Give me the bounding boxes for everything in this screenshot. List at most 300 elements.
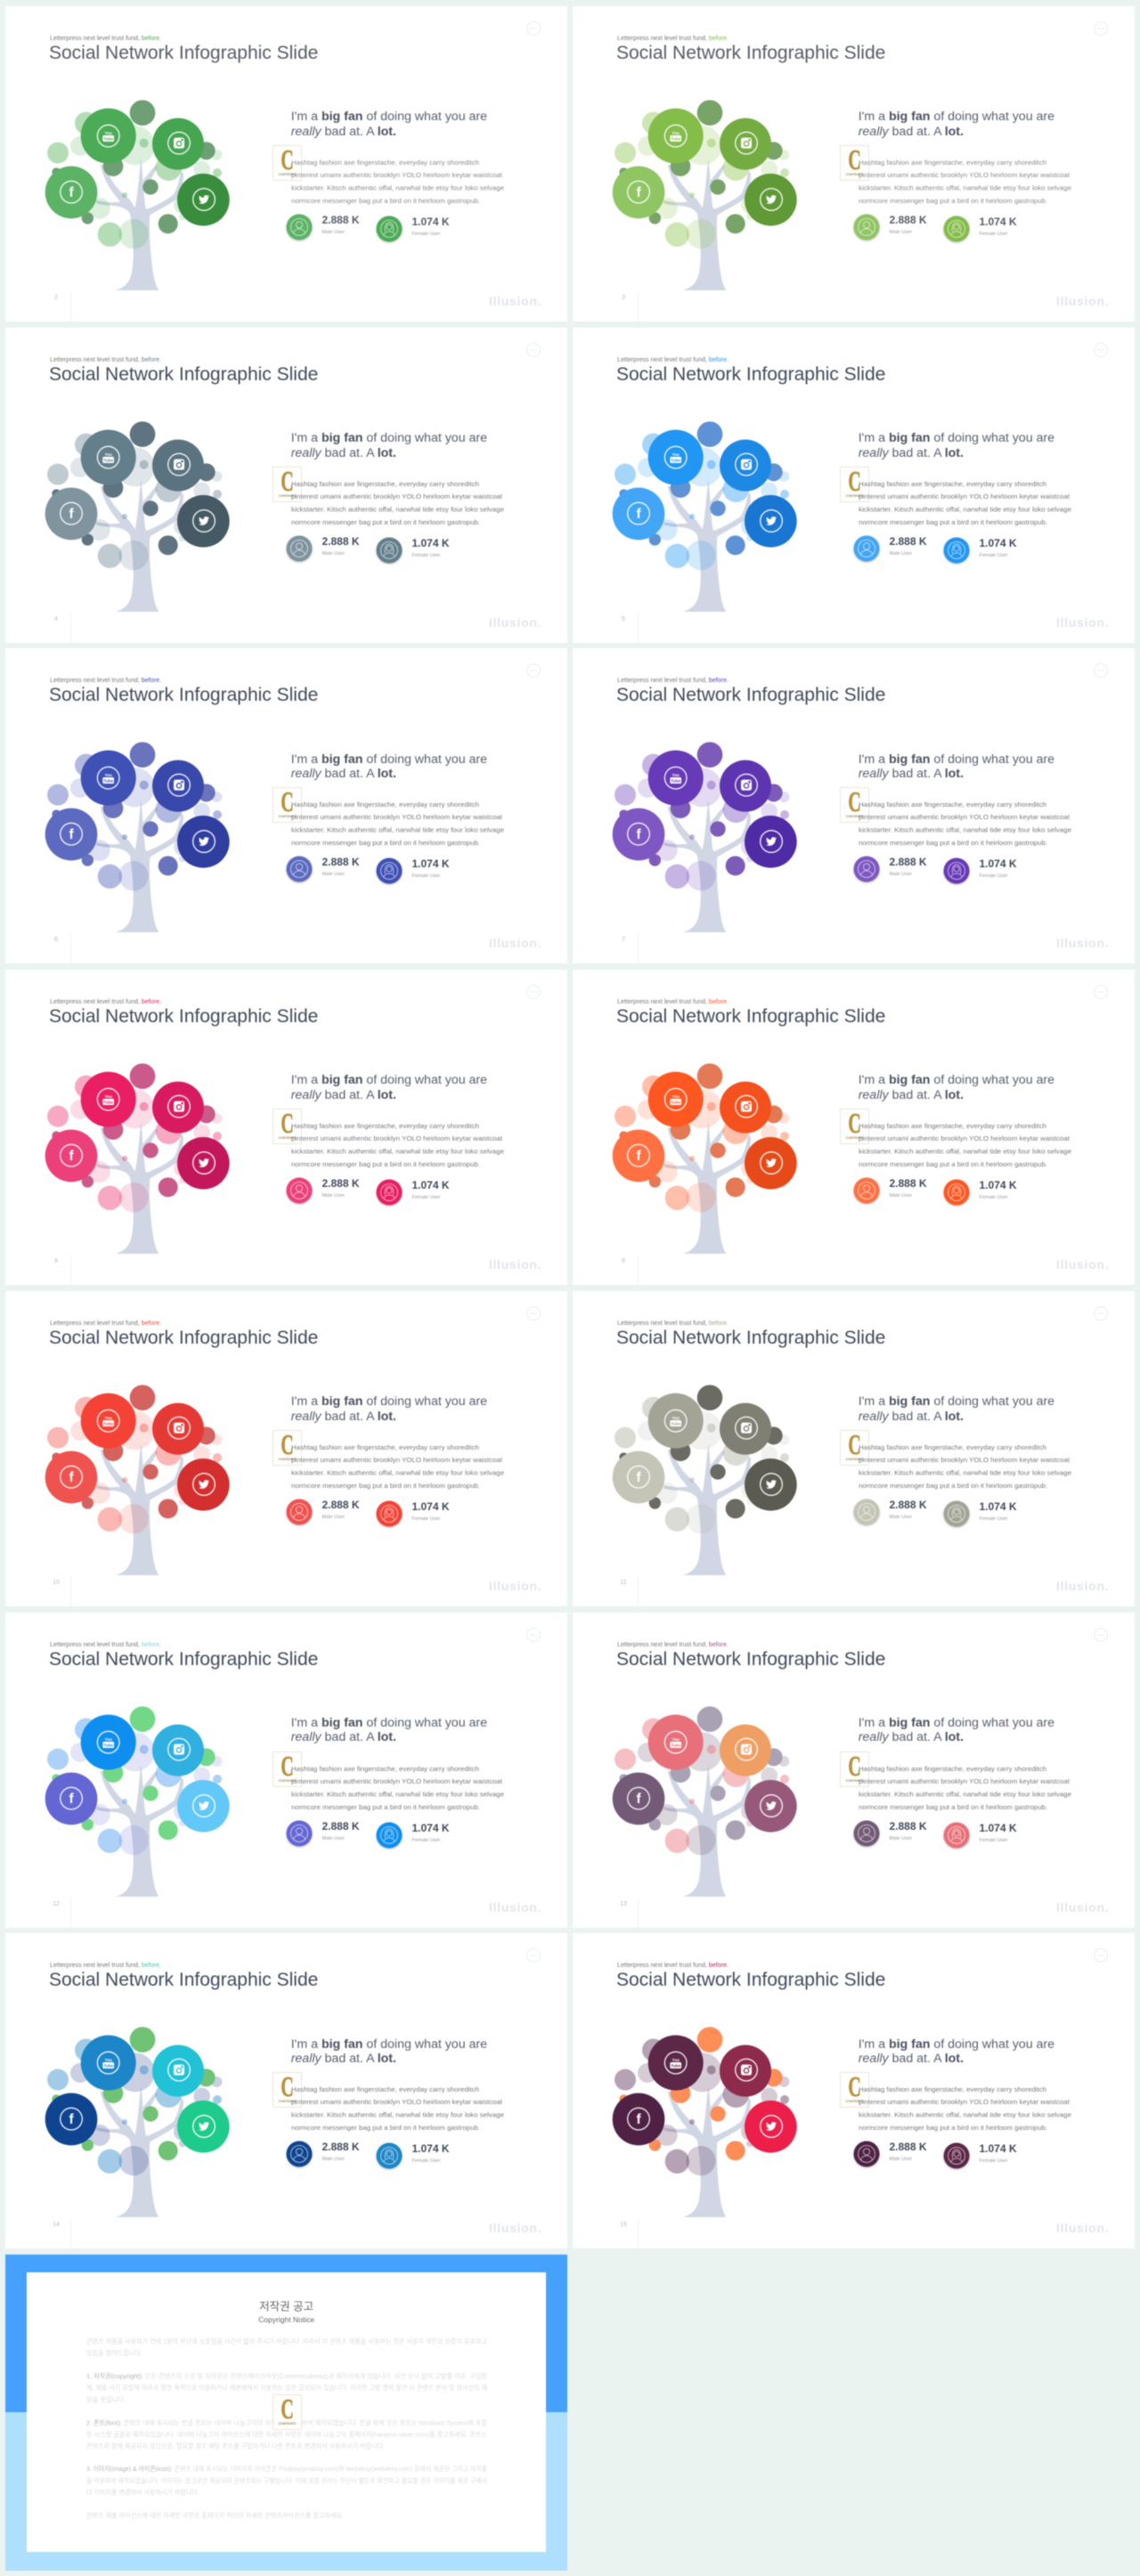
bubble: Instagram bbox=[720, 1724, 771, 1776]
headline: I'm a big fan of doing what you are bbox=[291, 2037, 487, 2052]
headline bbox=[291, 1716, 487, 1745]
bubble: YouTube: You bbox=[672, 131, 680, 135]
bubble: YouTube: Tube bbox=[671, 136, 680, 141]
stat: male users bbox=[285, 855, 360, 884]
panel: slide 13 rose tree bbox=[573, 1612, 1135, 1927]
stat: female users bbox=[943, 1822, 1032, 1852]
icon: menu dots bbox=[525, 1947, 542, 1963]
stat: female users bbox=[376, 1500, 465, 1531]
body text bbox=[290, 801, 504, 848]
stat: female users: 1.074 K bbox=[411, 1500, 450, 1513]
panel: slide 12 blue and green tree bbox=[5, 1612, 567, 1927]
body text bbox=[859, 158, 1072, 205]
bubble: Facebook bbox=[45, 2093, 97, 2146]
body text: pinterest umami authentic brooklyn YOLO heirloom keytar waistcoat bbox=[859, 492, 1070, 500]
body text: normcore messenger bag put a bird on it heirloom gastropub. bbox=[859, 197, 1047, 205]
headline: really bad at. A lot. bbox=[859, 1088, 964, 1102]
bubble: Facebook bbox=[45, 1772, 97, 1824]
bubble: YouTube bbox=[81, 2036, 136, 2091]
body text: kickstarter. Kitsch authentic offal, narwhal tide etsy four loko selvage bbox=[291, 505, 504, 513]
page number: 10 bbox=[53, 1580, 60, 1586]
bubble: YouTube: You bbox=[104, 131, 112, 135]
body text: normcore messenger bag put a bird on it heirloom gastropub. bbox=[291, 1482, 480, 1490]
headline: I'm a big fan of doing what you are bbox=[291, 1073, 487, 1087]
body text: kickstarter. Kitsch authentic offal, narwhal tide etsy four loko selvage bbox=[859, 183, 1071, 192]
title: Social Network Infographic Slide bbox=[616, 1970, 885, 1990]
bubble: YouTube: You bbox=[672, 2058, 680, 2062]
stat: female users: Female User bbox=[411, 553, 441, 558]
icon: menu dots bbox=[1094, 21, 1108, 36]
bubble: YouTube: Tube bbox=[671, 779, 680, 784]
page number: 5 bbox=[622, 616, 625, 622]
bubble: YouTube bbox=[81, 109, 136, 164]
body text: Hashtag fashion axe fingerstache, everyday carry shoreditch bbox=[291, 480, 479, 488]
bubble: YouTube bbox=[648, 751, 704, 806]
body text: Hashtag fashion axe fingerstache, everyday carry shoreditch bbox=[291, 1443, 479, 1451]
stat: female users: 1.074 K bbox=[980, 857, 1017, 870]
stat: male users: Male User bbox=[322, 551, 345, 557]
notice paragraphs: 있음을 알려드립니다. bbox=[86, 2348, 142, 2357]
bubble: Instagram bbox=[152, 118, 204, 170]
body text: pinterest umami authentic brooklyn YOLO heirloom keytar waistcoat bbox=[859, 2098, 1070, 2106]
body text bbox=[291, 1117, 514, 1179]
bubble: Instagram bbox=[152, 1402, 204, 1454]
body text: Hashtag fashion axe fingerstache, everyday carry shoreditch bbox=[859, 1765, 1046, 1773]
bubble: Facebook: f bbox=[636, 1149, 641, 1164]
body text: Hashtag fashion axe fingerstache, everyday carry shoreditch bbox=[291, 801, 479, 809]
page number: 8 bbox=[54, 1258, 58, 1264]
bubble: YouTube: Tube bbox=[103, 2064, 113, 2068]
body text: kickstarter. Kitsch authentic offal, narwhal tide etsy four loko selvage bbox=[291, 1790, 504, 1798]
body text: pinterest umami authentic brooklyn YOLO heirloom keytar waistcoat bbox=[291, 171, 502, 179]
watermark logo: CONTENTS bbox=[279, 494, 296, 498]
icon: menu dots bbox=[1093, 1305, 1109, 1321]
headline: really bad at. A lot. bbox=[859, 1410, 964, 1424]
bubble: Facebook: f bbox=[69, 1792, 74, 1806]
body text: normcore messenger bag put a bird on it heirloom gastropub. bbox=[859, 1802, 1047, 1810]
body text: kickstarter. Kitsch authentic offal, narwhal tide etsy four loko selvage bbox=[859, 2111, 1071, 2119]
tree chart bbox=[594, 1365, 808, 1588]
stat: male users: Male User bbox=[889, 2157, 912, 2162]
bubble: YouTube: Tube bbox=[103, 1421, 113, 1426]
stat: female users: Female User bbox=[980, 1838, 1008, 1843]
body text: normcore messenger bag put a bird on it heirloom gastropub. bbox=[859, 517, 1047, 525]
stat: male users bbox=[852, 214, 927, 242]
stat: male users: 2.888 K bbox=[322, 1177, 360, 1190]
stat: male users: 2.888 K bbox=[889, 1177, 927, 1190]
bubble: Twitter bbox=[177, 816, 230, 868]
body text: pinterest umami authentic brooklyn YOLO heirloom keytar waistcoat bbox=[859, 171, 1070, 179]
watermark logo: CONTENTS bbox=[846, 173, 863, 176]
bubble: Facebook bbox=[45, 487, 97, 540]
watermark logo bbox=[273, 1751, 302, 1786]
page number: 15 bbox=[620, 2222, 627, 2228]
page number: 12 bbox=[53, 1900, 60, 1907]
tagline: Letterpress next level trust fund, before. bbox=[617, 356, 729, 363]
stat: male users: 2.888 K bbox=[322, 214, 360, 226]
icon: menu dots bbox=[1093, 1947, 1109, 1963]
stat: male users bbox=[853, 1820, 942, 1850]
stat: male users: Male User bbox=[889, 1515, 912, 1520]
headline: really bad at. A lot. bbox=[291, 125, 396, 139]
bubble: Instagram bbox=[720, 439, 771, 491]
bubble: Twitter bbox=[745, 174, 797, 226]
tagline: Letterpress next level trust fund, before. bbox=[50, 677, 161, 684]
icon: menu dots bbox=[1094, 343, 1108, 357]
stat: male users bbox=[285, 534, 360, 564]
stat: male users: 2.888 K bbox=[889, 856, 927, 868]
bubble: Facebook bbox=[613, 1451, 664, 1503]
stat: female users: 1.074 K bbox=[980, 1179, 1017, 1191]
panel: slide 6 indigo tree bbox=[5, 648, 567, 963]
body text bbox=[291, 1438, 514, 1500]
body text: pinterest umami authentic brooklyn YOLO heirloom keytar waistcoat bbox=[859, 1777, 1070, 1785]
bubble: Twitter bbox=[745, 495, 797, 547]
notice paragraphs: 콘텐츠 제품 라이선스에 대한 자세한 사항은 홈페이지 하단의 자세한 콘텐츠라이선스를 참고하세요. bbox=[86, 2510, 344, 2519]
watermark logo bbox=[273, 145, 302, 181]
stat: male users: Male User bbox=[889, 872, 912, 877]
tagline: Letterpress next level trust fund, before. bbox=[50, 1640, 161, 1647]
title: Social Network Infographic Slide bbox=[49, 1970, 318, 1990]
bubble: YouTube: You bbox=[104, 452, 112, 457]
brand: Illusion. bbox=[1056, 1900, 1109, 1914]
stat: male users: Male User bbox=[322, 2157, 345, 2162]
stat: male users: Male User bbox=[322, 230, 345, 235]
bubble: Facebook: f bbox=[69, 185, 74, 200]
brand: Illusion. bbox=[489, 1579, 542, 1593]
stat: female users: Female User bbox=[411, 874, 441, 879]
stat: female users bbox=[943, 1500, 1032, 1531]
panel: slide 14 teal tree bbox=[5, 1933, 567, 2248]
stat: female users bbox=[375, 857, 450, 886]
headline: I'm a big fan of doing what you are bbox=[291, 431, 487, 445]
watermark logo bbox=[273, 787, 302, 823]
icon: menu dots bbox=[1093, 1626, 1109, 1642]
stat: male users: Male User bbox=[889, 1193, 912, 1199]
stat: male users bbox=[285, 214, 360, 242]
title: Social Network Infographic Slide bbox=[616, 685, 885, 705]
bubble: Twitter bbox=[745, 1459, 797, 1510]
icon: menu dots bbox=[1093, 984, 1109, 1000]
bubble: Twitter bbox=[177, 1779, 230, 1832]
stat: male users: Male User bbox=[322, 1193, 345, 1199]
panel: slide 2 green tree bbox=[5, 6, 567, 321]
headline bbox=[859, 2037, 1054, 2067]
body text: pinterest umami authentic brooklyn YOLO heirloom keytar waistcoat bbox=[291, 2098, 502, 2106]
watermark logo: CONTENTS bbox=[279, 1458, 296, 1461]
stat: female users: Female User bbox=[980, 2158, 1008, 2164]
stat: male users: 2.888 K bbox=[889, 214, 927, 226]
headline: really bad at. A lot. bbox=[859, 767, 964, 781]
headline: really bad at. A lot. bbox=[859, 1730, 964, 1744]
stat: female users: Female User bbox=[411, 1516, 441, 1522]
page number: 6 bbox=[54, 937, 58, 943]
stat: male users bbox=[853, 2141, 942, 2171]
bubble: Facebook: f bbox=[69, 1470, 74, 1485]
headline bbox=[859, 1073, 1054, 1103]
panel: slide 3 light green tree bbox=[573, 6, 1135, 321]
watermark logo: CONTENTS bbox=[846, 494, 863, 498]
body text: Hashtag fashion axe fingerstache, everyday carry shoreditch bbox=[291, 2085, 479, 2093]
watermark logo: CONTENTS bbox=[846, 2100, 863, 2103]
stat: male users: 2.888 K bbox=[322, 1820, 360, 1832]
headline: really bad at. A lot. bbox=[859, 446, 964, 460]
body text bbox=[859, 1438, 1081, 1500]
bubble: Twitter bbox=[745, 1779, 797, 1832]
body text bbox=[859, 1759, 1081, 1822]
bubble: YouTube: You bbox=[104, 773, 112, 777]
title: Social Network Infographic Slide bbox=[49, 43, 318, 63]
bubble: YouTube bbox=[648, 109, 704, 164]
bubble: Facebook bbox=[613, 1130, 664, 1182]
headline: really bad at. A lot. bbox=[291, 767, 396, 781]
panel: slide 11 grey tree bbox=[573, 1291, 1135, 1606]
body text: Hashtag fashion axe fingerstache, everyday carry shoreditch bbox=[859, 1122, 1046, 1130]
headline: really bad at. A lot. bbox=[859, 125, 964, 139]
body text bbox=[859, 480, 1072, 527]
watermark logo bbox=[273, 1109, 302, 1144]
body text: pinterest umami authentic brooklyn YOLO heirloom keytar waistcoat bbox=[291, 492, 502, 500]
stat: male users bbox=[852, 534, 927, 564]
headline bbox=[290, 752, 487, 781]
body text: kickstarter. Kitsch authentic offal, narwhal tide etsy four loko selvage bbox=[859, 1148, 1071, 1156]
title: Social Network Infographic Slide bbox=[49, 1328, 318, 1348]
tree chart bbox=[611, 100, 798, 290]
body text: pinterest umami authentic brooklyn YOLO heirloom keytar waistcoat bbox=[291, 1456, 502, 1464]
tagline: Letterpress next level trust fund, before. bbox=[50, 356, 161, 363]
notice subheading: Copyright Notice bbox=[258, 2315, 314, 2324]
bubble: Facebook bbox=[45, 167, 97, 218]
headline bbox=[291, 1073, 487, 1103]
page number: 13 bbox=[620, 1900, 627, 1907]
stat: female users: 1.074 K bbox=[411, 215, 450, 228]
watermark logo: CONTENTS bbox=[279, 2422, 296, 2426]
bubble: Facebook bbox=[613, 487, 664, 540]
body text: kickstarter. Kitsch authentic offal, narwhal tide etsy four loko selvage bbox=[291, 826, 504, 834]
tree chart bbox=[45, 420, 230, 613]
tagline: Letterpress next level trust fund, before. bbox=[50, 998, 161, 1005]
stat: female users: Female User bbox=[411, 1195, 441, 1200]
title: Social Network Infographic Slide bbox=[616, 1006, 885, 1027]
body text bbox=[290, 158, 504, 205]
bubble: Twitter bbox=[177, 1459, 230, 1510]
watermark logo bbox=[273, 467, 302, 502]
title: Social Network Infographic Slide bbox=[49, 1006, 318, 1027]
icon: menu dots bbox=[525, 1626, 542, 1642]
headline bbox=[291, 2037, 487, 2067]
bubble: Facebook bbox=[45, 1130, 97, 1182]
tree chart bbox=[611, 420, 798, 613]
bubble: Facebook bbox=[45, 809, 97, 861]
bubble: Twitter bbox=[745, 816, 797, 868]
body text: Hashtag fashion axe fingerstache, everyday carry shoreditch bbox=[291, 1122, 479, 1130]
tree chart bbox=[27, 1044, 240, 1266]
body text: pinterest umami authentic brooklyn YOLO heirloom keytar waistcoat bbox=[291, 814, 502, 822]
notice paragraphs: 2. 폰트(font): 콘텐츠 내에 표시되는 한글 폰트는 네이버 나눔고딕의 저작권을 준수하여 제작되었습니다. 한글 외에 모든 폰트는 Windows System에 포함 bbox=[86, 2418, 487, 2426]
title: Social Network Infographic Slide bbox=[49, 1649, 318, 1669]
stat: female users: Female User bbox=[980, 874, 1008, 879]
body text: pinterest umami authentic brooklyn YOLO heirloom keytar waistcoat bbox=[291, 1777, 502, 1785]
panel: slide 15 wine tree bbox=[573, 1933, 1135, 2248]
brand: Illusion. bbox=[489, 1900, 542, 1914]
panel: copyright notice bbox=[5, 2255, 567, 2571]
body text: Hashtag fashion axe fingerstache, everyday carry shoreditch bbox=[859, 158, 1046, 167]
stat: female users: 1.074 K bbox=[980, 1500, 1017, 1513]
icon: menu dots bbox=[1094, 663, 1108, 678]
stat: male users bbox=[286, 1820, 375, 1850]
stat: female users bbox=[943, 2142, 1032, 2173]
panel: slide 8 pink tree bbox=[5, 970, 567, 1285]
bubble: Facebook: f bbox=[69, 1149, 74, 1164]
stat: male users: Male User bbox=[889, 551, 912, 557]
bubble: Twitter bbox=[177, 1137, 230, 1190]
body text: Hashtag fashion axe fingerstache, everyday carry shoreditch bbox=[291, 158, 479, 167]
bubble: YouTube: Tube bbox=[671, 1743, 680, 1747]
brand: Illusion. bbox=[1056, 615, 1109, 630]
stat: male users: 2.888 K bbox=[322, 856, 360, 868]
stat: male users: Male User bbox=[322, 1515, 345, 1520]
stat: male users bbox=[853, 1499, 942, 1529]
body text: pinterest umami authentic brooklyn YOLO heirloom keytar waistcoat bbox=[859, 1456, 1070, 1464]
body text: kickstarter. Kitsch authentic offal, narwhal tide etsy four loko selvage bbox=[291, 1468, 504, 1476]
page number: 2 bbox=[54, 295, 58, 301]
headline: really bad at. A lot. bbox=[291, 2052, 396, 2066]
tree chart bbox=[594, 2007, 808, 2230]
body text: Hashtag fashion axe fingerstache, everyday carry shoreditch bbox=[859, 2085, 1046, 2093]
bubble: YouTube: Tube bbox=[103, 779, 113, 784]
stat: male users: Male User bbox=[889, 1836, 912, 1841]
bubble: Facebook: f bbox=[69, 827, 74, 842]
headline: really bad at. A lot. bbox=[291, 1088, 396, 1102]
stat: female users: 1.074 K bbox=[980, 215, 1017, 228]
body text: normcore messenger bag put a bird on it heirloom gastropub. bbox=[859, 2124, 1047, 2132]
stat: female users: Female User bbox=[980, 1195, 1008, 1200]
stat: female users bbox=[943, 857, 1032, 888]
bubble: YouTube: You bbox=[672, 1416, 680, 1420]
bubble: YouTube: You bbox=[672, 452, 680, 457]
watermark logo: CONTENTS bbox=[279, 1779, 296, 1783]
body text: Hashtag fashion axe fingerstache, everyday carry shoreditch bbox=[859, 480, 1046, 488]
icon: menu dots bbox=[526, 663, 541, 678]
bubble: YouTube bbox=[81, 751, 136, 806]
icon: menu dots bbox=[526, 21, 541, 36]
bubble: Twitter bbox=[177, 495, 230, 547]
bubble: Facebook bbox=[613, 167, 664, 218]
bubble: Instagram bbox=[152, 2045, 204, 2097]
stat: female users: 1.074 K bbox=[411, 2142, 450, 2155]
bubble: YouTube bbox=[81, 1072, 136, 1127]
tree chart bbox=[27, 1365, 240, 1588]
tagline: Letterpress next level trust fund, before. bbox=[50, 1320, 161, 1327]
watermark logo: CONTENTS bbox=[279, 2100, 296, 2103]
bubble: Twitter bbox=[177, 174, 230, 226]
notice paragraphs: 을 이용하여 제작되었습니다. 이미지는 링크로만 제공되며 콘텐츠와는 구별됩니다. 이에 포함 관리는 무단이 별도로 확인하고 필요할 경우 이미지를 새로 구해서 bbox=[86, 2475, 487, 2484]
bubble: Twitter bbox=[177, 2101, 230, 2153]
bubble: Facebook: f bbox=[636, 1470, 641, 1485]
headline: really bad at. A lot. bbox=[291, 1410, 396, 1424]
bubble: YouTube: You bbox=[672, 773, 680, 777]
stat: male users: Male User bbox=[322, 1836, 345, 1841]
bubble: YouTube bbox=[648, 1714, 704, 1769]
body text: normcore messenger bag put a bird on it heirloom gastropub. bbox=[291, 197, 480, 205]
body text: kickstarter. Kitsch authentic offal, narwhal tide etsy four loko selvage bbox=[291, 183, 504, 192]
stat: female users bbox=[376, 1822, 465, 1852]
watermark logo bbox=[273, 1430, 302, 1466]
bubble: Facebook bbox=[613, 2093, 664, 2146]
stat: male users bbox=[853, 856, 942, 886]
brand: Illusion. bbox=[1056, 2221, 1109, 2235]
bubble: Instagram bbox=[720, 2045, 771, 2097]
page number: 4 bbox=[54, 616, 58, 622]
bubble: Instagram bbox=[720, 118, 771, 170]
stat: female users bbox=[943, 1179, 1032, 1209]
watermark logo: CONTENTS bbox=[846, 1779, 863, 1783]
stat: male users bbox=[286, 1499, 375, 1529]
stat: male users: Male User bbox=[889, 230, 912, 235]
panel: slide 4 blue-grey tree bbox=[5, 328, 567, 643]
stat: female users bbox=[376, 1179, 465, 1209]
stat: female users: Female User bbox=[980, 1516, 1008, 1522]
headline bbox=[290, 110, 487, 139]
body text: kickstarter. Kitsch authentic offal, narwhal tide etsy four loko selvage bbox=[291, 1148, 504, 1156]
brand: Illusion. bbox=[489, 1257, 542, 1272]
bubble: Facebook: f bbox=[636, 2112, 641, 2127]
stat: male users bbox=[286, 2141, 375, 2171]
tree chart bbox=[27, 2007, 240, 2230]
headline: I'm a big fan of doing what you are bbox=[291, 752, 487, 767]
stat: female users: Female User bbox=[980, 232, 1008, 237]
body text: normcore messenger bag put a bird on it heirloom gastropub. bbox=[291, 839, 480, 847]
body text bbox=[291, 2080, 514, 2142]
headline: I'm a big fan of doing what you are bbox=[859, 110, 1054, 124]
tagline: Letterpress next level trust fund, before. bbox=[617, 1962, 729, 1969]
page number: 9 bbox=[622, 1258, 625, 1264]
body text bbox=[859, 2080, 1081, 2142]
stat: male users: 2.888 K bbox=[322, 1499, 360, 1511]
bubble: YouTube: Tube bbox=[671, 2064, 680, 2068]
panel: slide 10 red tree bbox=[5, 1291, 567, 1606]
watermark logo bbox=[840, 467, 869, 502]
page number: 11 bbox=[620, 1580, 627, 1586]
watermark logo: CONTENTS bbox=[846, 1136, 863, 1140]
body text: normcore messenger bag put a bird on it heirloom gastropub. bbox=[291, 517, 480, 525]
bubble: Twitter bbox=[745, 2101, 797, 2153]
bubble: YouTube: You bbox=[104, 1416, 112, 1420]
brand: Illusion. bbox=[489, 936, 542, 950]
body text bbox=[290, 480, 504, 527]
bubble: Twitter bbox=[745, 1137, 797, 1190]
page number: 7 bbox=[622, 937, 625, 943]
brand: Illusion. bbox=[489, 294, 542, 308]
headline: I'm a big fan of doing what you are bbox=[859, 752, 1054, 767]
watermark logo: CONTENTS bbox=[279, 173, 296, 176]
tagline: Letterpress next level trust fund, before. bbox=[617, 1640, 729, 1647]
headline: I'm a big fan of doing what you are bbox=[859, 431, 1054, 445]
brand: Illusion. bbox=[489, 615, 542, 630]
title: Social Network Infographic Slide bbox=[616, 364, 885, 385]
watermark logo bbox=[273, 2394, 302, 2430]
bubble: YouTube bbox=[648, 2036, 704, 2091]
tagline: Letterpress next level trust fund, before. bbox=[50, 1962, 161, 1969]
headline: I'm a big fan of doing what you are bbox=[859, 1394, 1054, 1409]
stat: male users bbox=[853, 1177, 942, 1207]
watermark logo bbox=[840, 1751, 869, 1786]
tree chart bbox=[45, 741, 230, 933]
bubble: Instagram bbox=[152, 1724, 204, 1776]
bubble: YouTube: Tube bbox=[103, 1100, 113, 1104]
stat: female users: 1.074 K bbox=[980, 537, 1017, 549]
panel: slide 7 purple tree bbox=[573, 648, 1135, 963]
